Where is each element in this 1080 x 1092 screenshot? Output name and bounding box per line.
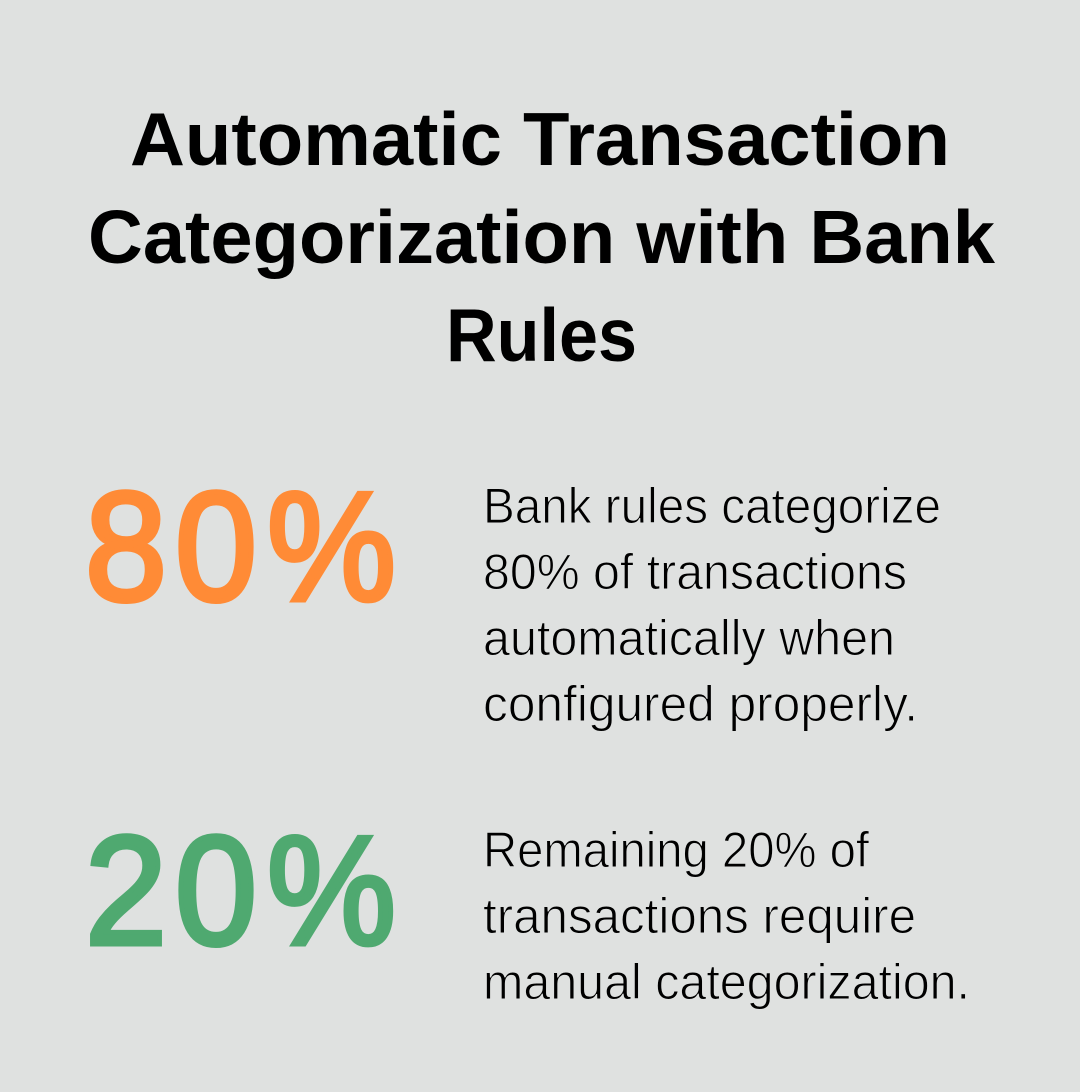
- text block: 80% description: Bank rules categorize: [483, 478, 941, 534]
- stat: 80% figure: %: [267, 460, 396, 633]
- stat: 80% figure: 0: [175, 460, 257, 633]
- title: Categorization with Bank: [88, 195, 995, 279]
- stat: 20% figure: 2: [85, 804, 167, 977]
- stat: 80% figure: 8: [85, 460, 167, 633]
- text block: 80% description: 80% of transactions: [483, 544, 907, 600]
- stat: 20% figure: 0: [175, 804, 257, 977]
- text block: 80% description: [483, 478, 941, 732]
- text block: 80% description: automatically when: [483, 610, 895, 666]
- stat: 20% figure: [85, 804, 396, 977]
- stat: 20% figure: %: [267, 804, 396, 977]
- text block: 80% description: configured properly.: [483, 676, 918, 732]
- text block: 20% description: [483, 822, 970, 1010]
- text block: 20% description: manual categorization.: [483, 954, 970, 1010]
- text block: 20% description: transactions require: [483, 888, 916, 944]
- title: Automatic Transaction: [130, 97, 950, 181]
- text block: 20% description: Remaining 20% of: [483, 822, 869, 878]
- stat: 80% figure: [85, 460, 396, 633]
- title: [88, 97, 995, 377]
- title: Rules: [446, 293, 637, 377]
